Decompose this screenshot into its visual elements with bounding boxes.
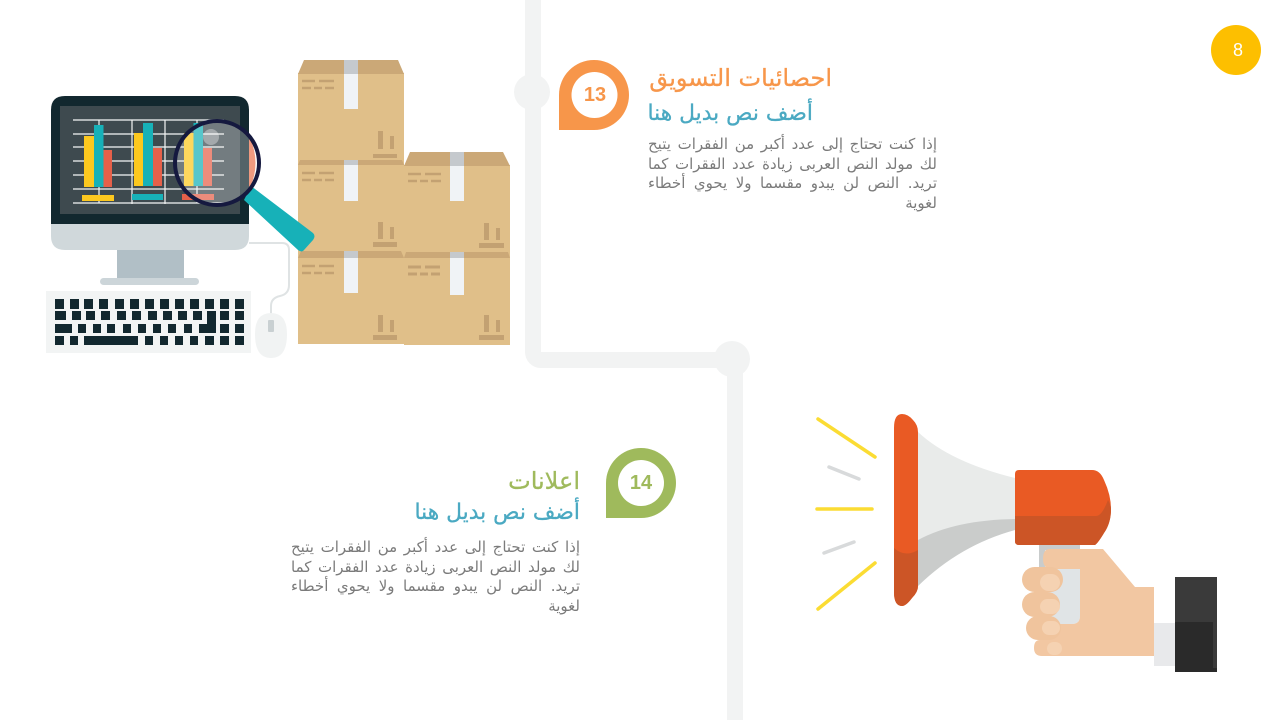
subheading: marketing: أضف نص بديل هنا <box>648 101 813 126</box>
text block: marketing: إذا كنت تحتاج إلى عدد أكبر من الفقرات يتيح <box>648 135 937 153</box>
icon: computer with chart <box>51 96 289 315</box>
pin marker 14 <box>606 448 676 518</box>
text block: advertising: لغوية <box>548 596 580 614</box>
shirt cuff <box>1154 623 1175 666</box>
megaphone handle <box>1039 545 1080 624</box>
megaphone cone <box>918 432 1015 586</box>
text block: marketing <box>648 134 937 212</box>
box: middle right <box>404 152 510 253</box>
box: middle left <box>298 160 404 252</box>
number 13: 13 <box>584 84 606 106</box>
sound rays <box>817 419 875 609</box>
heading: advertising: اعلانات <box>508 467 580 495</box>
megaphone rim <box>894 414 918 606</box>
chart grid <box>73 120 224 204</box>
icon: mouse <box>255 313 287 358</box>
text block: marketing: لغوية <box>905 194 937 212</box>
text block: marketing: لك مولد النص العربى زيادة عدد الفقرات كما <box>648 154 937 172</box>
subheading: advertising: أضف نص بديل هنا <box>415 500 580 525</box>
page number: 8 <box>1233 40 1243 60</box>
text block: advertising <box>291 536 580 614</box>
megaphone body <box>1015 470 1111 545</box>
jacket sleeve <box>1175 577 1217 672</box>
icon: stacked cardboard boxes <box>298 60 510 345</box>
text block: advertising: إذا كنت تحتاج إلى عدد أكبر من الفقرات يتيح <box>291 538 580 556</box>
page number badge <box>1211 25 1261 75</box>
heading: marketing statistics: احصائيات التسويق <box>649 64 832 92</box>
icon: keyboard <box>46 291 251 353</box>
hand <box>1022 549 1154 656</box>
text block: marketing: تريد. النص لن يبدو مقسما ولا يحوي أخطاء <box>648 174 937 192</box>
pin marker 13 <box>559 60 629 130</box>
number 14: 14 <box>630 472 652 494</box>
bar chart <box>82 123 214 201</box>
box: bottom left <box>298 251 404 344</box>
timeline connector <box>514 0 750 720</box>
icon: megaphone held in hand <box>817 414 1217 672</box>
icon: magnifying glass <box>175 121 314 252</box>
text block: advertising: لك مولد النص العربى زيادة عدد الفقرات كما <box>291 558 580 576</box>
box: bottom right <box>404 252 510 345</box>
text block: advertising: تريد. النص لن يبدو مقسما ولا يحوي أخطاء <box>291 577 580 595</box>
box: top left <box>298 60 404 161</box>
